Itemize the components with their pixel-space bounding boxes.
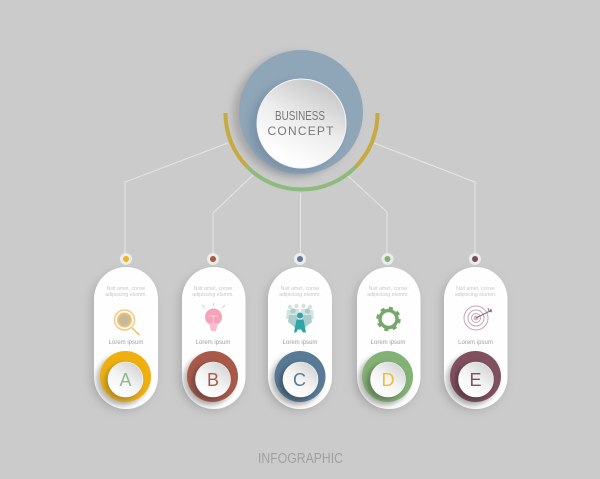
card B: B	[207, 370, 219, 390]
card A: Lorem ipsum	[109, 340, 143, 346]
heading: business concept: CONCEPT	[268, 124, 334, 138]
card A: A	[119, 370, 132, 390]
card C: Lorem ipsum	[283, 340, 317, 346]
central concept circle	[233, 50, 363, 177]
icon: magnifier	[114, 310, 140, 335]
card E: Lorem ipsum	[458, 340, 493, 346]
card E: E	[469, 370, 482, 390]
card C: adipiscing elumm.	[279, 292, 321, 298]
card E	[440, 253, 508, 412]
card E: Nsit amet, conse	[456, 286, 495, 292]
card C	[264, 253, 332, 412]
icon: target with arrow	[464, 306, 492, 330]
card B: Nsit amet, conse	[194, 286, 232, 292]
card A: adipiscing elumm.	[105, 292, 147, 298]
icon: people group	[286, 304, 314, 332]
card B: Lorem ipsum	[196, 340, 230, 346]
heading: business concept: BUSINESS	[275, 108, 325, 123]
card B	[178, 253, 246, 412]
icon: light bulb	[202, 303, 225, 331]
card C: C	[293, 370, 306, 390]
card A: Nsit amet, conse	[107, 286, 145, 292]
card D: Nsit amet, conse	[369, 286, 407, 292]
card A	[90, 253, 158, 412]
icon: gear	[378, 308, 399, 330]
card D	[353, 253, 420, 412]
card D: adipiscing elumm.	[367, 292, 409, 298]
semicircular arc	[225, 113, 378, 190]
footer title: INFOGRAPHIC	[258, 451, 343, 467]
card E: adipiscing elumm.	[455, 292, 496, 298]
card B: adipiscing elumm.	[192, 292, 234, 298]
card C: Nsit amet, conse	[281, 286, 319, 292]
card D: D	[382, 370, 394, 390]
card D: Lorem ipsum	[371, 340, 405, 346]
connector lines	[125, 143, 475, 254]
heading: business concept	[268, 108, 334, 138]
